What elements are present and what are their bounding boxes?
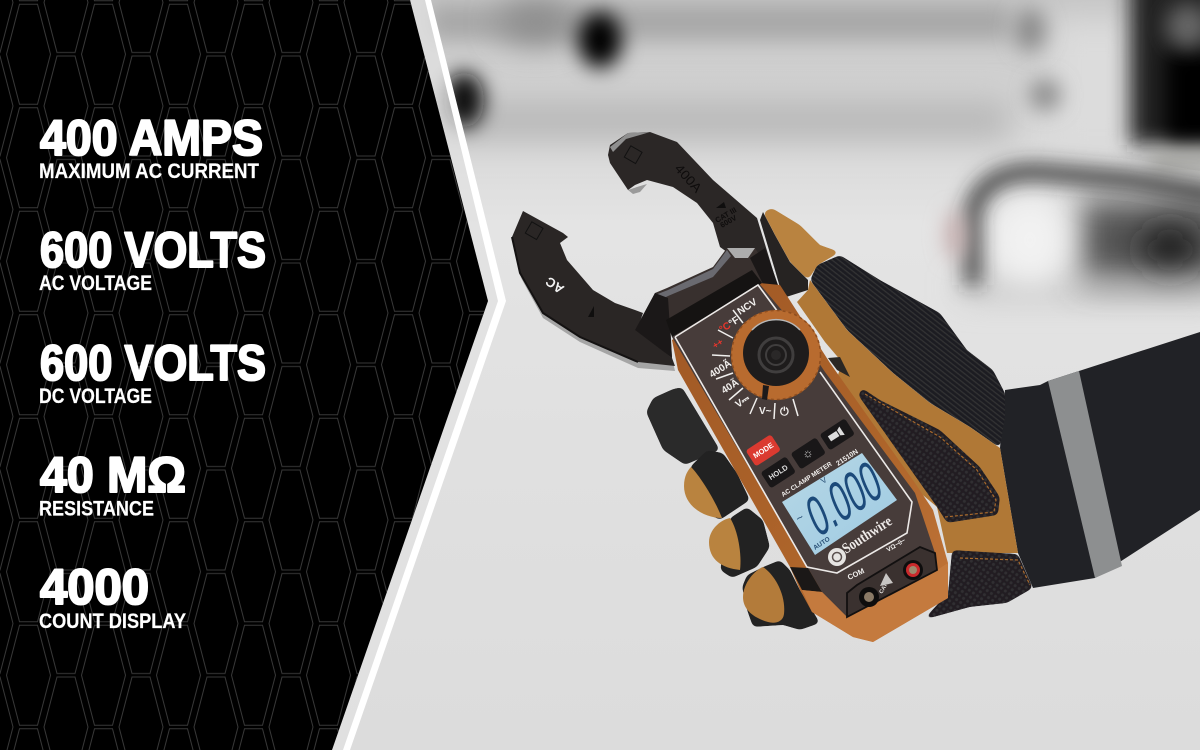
LCD reading: 0.000	[798, 448, 890, 549]
dial labels: 400Ã	[707, 357, 734, 381]
spec: 4000 count: COUNT DISPLAY	[39, 609, 186, 633]
bottom orange edge	[802, 563, 948, 642]
lower jaw AC label: AC	[542, 273, 567, 297]
glove lower panel	[923, 550, 1033, 620]
chevron white stripe	[343, 0, 506, 750]
dial labels: ++	[711, 337, 725, 351]
jack panel	[847, 547, 937, 617]
spec: 4000 count	[39, 559, 186, 633]
brand logo	[828, 513, 895, 566]
red jack	[903, 560, 923, 580]
dial labels: V~	[759, 406, 772, 417]
dial labels: NCV	[736, 297, 760, 318]
jack labels: VΩ⊣⊢	[885, 536, 907, 554]
dial labels: V⎓	[734, 393, 752, 411]
finger two	[690, 450, 750, 520]
lower-left black wedge	[790, 567, 822, 592]
lower jaw mark	[588, 306, 594, 317]
spec: 600 volts DC: DC VOLTAGE	[39, 384, 152, 408]
clamp meter body	[666, 270, 948, 642]
spec: 600 volts DC	[39, 335, 266, 408]
dial labels: °C°F	[718, 315, 742, 336]
upper jaw voltage marking: 600V	[718, 213, 738, 230]
background right cluster	[1050, 20, 1145, 155]
spec: 600 volts AC: AC VOLTAGE	[39, 271, 152, 295]
neck	[635, 248, 778, 358]
backlight button	[791, 437, 826, 470]
sleeve	[1000, 332, 1200, 588]
upper jaw symbol	[624, 146, 642, 164]
under-thumb dark piece	[828, 357, 850, 377]
lower panel stitching	[960, 558, 1030, 585]
black hexagon panel	[0, 0, 488, 750]
rotary dial	[731, 310, 821, 400]
face top bevel	[666, 270, 762, 337]
spec: 40 megaohm: 40 MΩ	[40, 447, 186, 503]
spec: 600 volts AC	[39, 222, 266, 295]
flashlight button	[820, 418, 855, 451]
LCD screen: AUTO	[812, 536, 831, 552]
dial labels: ⏻	[780, 405, 789, 418]
fingers	[646, 387, 820, 630]
finger three	[720, 507, 770, 578]
lower jaw symbol	[525, 222, 543, 240]
dial tick marks	[712, 310, 798, 419]
clamp jaws	[512, 132, 778, 371]
glove tan panel	[797, 280, 1018, 553]
face white outline	[675, 285, 912, 573]
backlight button: ☼	[802, 446, 814, 460]
spec: 40 megaohm: RESISTANCE	[39, 496, 154, 520]
finger four	[742, 560, 820, 630]
spec: 600 volts AC: 600 VOLTS	[40, 222, 266, 278]
upper jaw 400A engraving: 400A	[672, 161, 705, 196]
HOLD button: HOLD	[767, 463, 790, 482]
thumb tip	[763, 208, 840, 280]
spec: 400 amps: 400 AMPS	[40, 110, 263, 166]
meter face	[672, 282, 937, 617]
palm pad stitching	[865, 394, 996, 517]
lower jaw shadow	[520, 276, 675, 371]
upper jaw mark	[716, 202, 726, 208]
jack labels	[846, 536, 907, 595]
HOLD button	[761, 456, 796, 489]
finger one	[646, 387, 720, 465]
sleeve grey band	[1048, 371, 1122, 578]
glove back	[760, 208, 1033, 620]
brand logo: Southwire	[839, 513, 895, 557]
meter name label: AC CLAMP METER	[780, 461, 834, 499]
COM jack	[859, 587, 879, 607]
translucent chevron band	[332, 0, 499, 750]
jack labels: CAT III	[879, 577, 892, 595]
glove knit panel	[810, 255, 1005, 448]
spec: 4000 count: 4000	[40, 559, 149, 615]
jack labels: COM	[846, 566, 866, 582]
dial labels: 40Ã	[719, 376, 741, 397]
LCD screen	[782, 448, 897, 555]
MODE button	[746, 434, 781, 467]
LCD screen: V	[819, 475, 829, 486]
model label: 21510N	[835, 448, 860, 468]
thumb dark strip	[760, 212, 808, 298]
LCD screen: ~	[793, 510, 807, 526]
lower jaw	[512, 211, 675, 366]
upper jaw	[608, 132, 778, 290]
MODE button: MODE	[751, 441, 775, 460]
dial labels	[707, 297, 789, 418]
upper jaw CAT marking: CAT III	[714, 205, 738, 225]
spec: 400 amps: MAXIMUM AC CURRENT	[39, 159, 259, 183]
spec: 600 volts DC: 600 VOLTS	[40, 335, 266, 391]
glove palm pad	[858, 388, 1000, 523]
